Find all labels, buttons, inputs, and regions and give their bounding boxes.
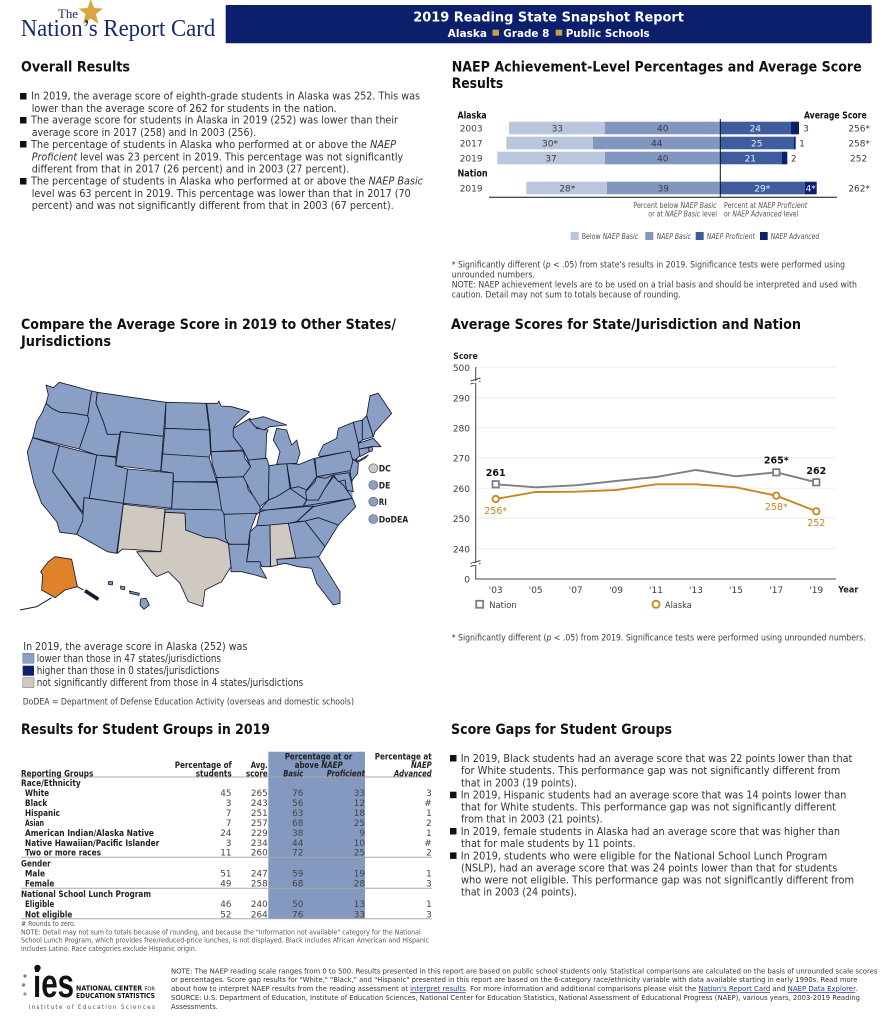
legend: DC, DE, RI, DoDEA markers: DE <box>379 481 390 491</box>
text block: table notes <box>21 919 429 953</box>
bar: Alaska 2019: 252 <box>850 154 867 164</box>
table rows: race/ethnicity: Native Hawaiian/Pacific Islander <box>25 839 160 849</box>
table rows: race/ethnicity: 2 <box>426 849 432 859</box>
data labels: 265* <box>764 456 789 466</box>
data labels <box>484 456 826 529</box>
bar: Nation 2019: 28* <box>559 184 576 194</box>
bar: Alaska 2003: 24 <box>750 124 761 134</box>
state: Alaska (orange) <box>20 557 98 610</box>
line chart: average scores: 240 <box>453 545 470 555</box>
table rows: gender: 49 <box>220 880 232 890</box>
line chart: average scores: '15 <box>729 586 743 596</box>
bar: Alaska 2019 <box>460 152 867 164</box>
states with higher scores than Alaska (blue) <box>27 382 392 609</box>
text block: achievement notes: unrounded numbers. <box>452 270 535 280</box>
table rows: gender: Male <box>25 870 45 880</box>
line chart: average scores: Year <box>837 586 859 596</box>
table rows: race/ethnicity: Two or more races <box>25 849 101 859</box>
legend: achievement levels: NAEP Advanced <box>771 232 819 241</box>
table header: Reporting Groups <box>21 769 93 779</box>
bar: Alaska 2017: 44 <box>651 139 663 149</box>
table rows: National School Lunch Program: 50 <box>292 900 304 910</box>
logo: The Nation's Report Card: Nation’s Report Card <box>21 15 215 42</box>
legend: map key <box>23 641 354 708</box>
text block: overall results bullets: The percentage of students in Alaska who performed at or above the NAEP Basic <box>30 176 423 188</box>
table rows: race/ethnicity: Hispanic <box>25 809 60 819</box>
data labels: 256* <box>484 506 507 517</box>
data labels: 252 <box>807 518 825 529</box>
table rows: race/ethnicity: 63 <box>292 809 303 819</box>
table rows: race/ethnicity: 265 <box>251 789 268 799</box>
text block: table notes: NOTE: Detail may not sum to totals because of rounding, and because the "Information not available" category for the National <box>21 927 421 936</box>
table rows: National School Lunch Program: 13 <box>354 900 365 910</box>
line chart: average scores: '17 <box>769 586 783 596</box>
bar: Nation 2019: 29* <box>754 184 771 194</box>
logo: IES National Center for Education Statistics: EDUCATION STATISTICS <box>76 992 155 1000</box>
table header: score <box>246 769 268 779</box>
bar: Alaska 2017: 1 <box>799 139 805 149</box>
text block: score gaps bullets: that for White students. This performance gap was not significantly different <box>461 802 836 814</box>
line chart: average scores: 250 <box>453 515 470 525</box>
table header: students <box>196 769 232 779</box>
line chart: average scores: '07 <box>569 586 583 596</box>
table header: Basic <box>283 769 304 779</box>
table rows: race/ethnicity: 3 <box>226 839 232 849</box>
legend: DC, DE, RI, DoDEA markers <box>369 464 408 525</box>
table header: Proficient <box>327 769 366 779</box>
table rows: gender: Female <box>25 880 54 890</box>
table rows: National School Lunch Program: 240 <box>251 900 268 910</box>
legend: Nation and Alaska: Nation <box>489 601 517 611</box>
legend: map key: lower than those in 47 states/jurisdictions <box>37 653 221 665</box>
table header: Advanced <box>393 769 432 779</box>
bar: Alaska 2003: 3 <box>803 124 809 134</box>
bar: Nation 2019: 39 <box>658 184 669 194</box>
heading: Compare the Average Score: Compare the Average Score in 2019 to Other States/ <box>21 317 397 333</box>
table: student groups <box>21 752 432 920</box>
table rows: race/ethnicity: 10 <box>354 839 365 849</box>
bar: Nation 2019: 2019 <box>460 184 483 194</box>
table rows: National School Lunch Program: 3 <box>426 910 432 920</box>
legend: achievement levels: Below NAEP Basic <box>582 232 639 241</box>
bar: Alaska 2017: 258* <box>848 139 870 149</box>
table rows: National School Lunch Program: Not eligible <box>25 910 72 920</box>
heading: Compare the Average Score <box>20 317 397 350</box>
text block: footer notes: about how to interpret NAEP results from the reading assessment at interpret results. For more information and additional comparisons please visit the Nation's Report Card and NAEP Data Explorer. <box>171 984 858 993</box>
text block: overall results bullets: The percentage of students in Alaska who performed at or above the NAEP <box>30 139 397 151</box>
table rows: gender: 51 <box>220 870 232 880</box>
table rows: race/ethnicity: 44 <box>292 839 304 849</box>
chart: achievement-level stacked bars: Percent below NAEP Basic <box>633 201 717 210</box>
line chart: average scores: 290 <box>453 394 470 404</box>
table rows: race/ethnicity: 76 <box>292 789 304 799</box>
table rows: race/ethnicity: 68 <box>292 819 303 829</box>
bar: Alaska 2019: 40 <box>657 154 669 164</box>
table rows: gender: 68 <box>292 880 303 890</box>
logo: IES National Center for Education Statistics <box>22 962 155 1011</box>
table rows: gender: Gender <box>21 860 51 870</box>
table rows: race/ethnicity: 3 <box>226 799 232 809</box>
line chart: average scores: Score <box>453 352 478 362</box>
heading: Results for Student Groups: Results for Student Groups in 2019 <box>21 722 270 738</box>
heading: Compare the Average Score: Jurisdictions <box>20 334 111 350</box>
text block: score gaps bullets <box>450 753 854 899</box>
table rows: race/ethnicity: Asian <box>25 819 44 829</box>
table rows: race/ethnicity: American Indian/Alaska Native <box>25 829 154 839</box>
title banner: Alaska <box>448 28 487 40</box>
text block: score gaps bullets: that in 2003 (19 points). <box>461 777 577 789</box>
data labels: 258* <box>765 502 788 513</box>
logo: The Nation's Report Card <box>21 0 215 42</box>
legend: map key: In 2019, the average score in Alaska (252) was <box>23 641 247 653</box>
text block: score gaps bullets: that for male students by 11 points. <box>461 838 636 850</box>
table header: Percentage of <box>175 761 232 771</box>
table rows: race/ethnicity: Black <box>25 799 48 809</box>
table rows: gender: 3 <box>426 880 432 890</box>
table rows: race/ethnicity: 260 <box>251 849 268 859</box>
bar: Nation 2019 <box>460 182 870 194</box>
table rows: race/ethnicity: 229 <box>251 829 268 839</box>
table rows: race/ethnicity: 234 <box>251 839 268 849</box>
table rows: race/ethnicity: 25 <box>354 819 365 829</box>
legend: Nation and Alaska <box>476 601 692 611</box>
chart: achievement-level stacked bars: Nation <box>458 168 488 179</box>
line chart: average scores: '03 <box>489 586 503 596</box>
legend: achievement levels: NAEP Proficient <box>707 232 756 241</box>
line: Nation <box>492 469 820 488</box>
line chart: average scores: '09 <box>609 586 623 596</box>
bar: Alaska 2017: 25 <box>751 139 762 149</box>
heading: NAEP Achievement-Level Percentages <box>452 60 862 92</box>
table rows: National School Lunch Program: 33 <box>354 910 365 920</box>
text block: score gaps bullets: (NSLP), had an average score that was 24 points lower than that for students <box>461 862 837 874</box>
table rows: gender: 19 <box>354 870 365 880</box>
table rows: National School Lunch Program: Eligible <box>25 900 54 910</box>
table rows: gender <box>21 860 432 890</box>
heading: NAEP Achievement-Level Percentages: Results <box>452 76 503 92</box>
logo: IES National Center for Education Statistics: NATIONAL CENTER FOR <box>76 984 155 992</box>
text block: score gaps bullets: who were not eligible. This performance gap was not significantly different from <box>461 875 854 887</box>
table header: Percentage at or <box>285 752 353 762</box>
table rows: National School Lunch Program: National School Lunch Program <box>21 890 151 900</box>
text block: overall results bullets: percent) and was not significantly different from that in 2003 (67 percent). <box>32 200 394 212</box>
table rows: gender: 1 <box>426 870 432 880</box>
legend: map key: not significantly different from those in 4 states/jurisdictions <box>37 677 303 689</box>
text block: achievement notes: * Significantly different (p < .05) from state's results in 2019. Significance tests were performed using <box>452 260 845 270</box>
table rows: race/ethnicity: 24 <box>220 829 232 839</box>
table header: above NAEP <box>295 761 343 771</box>
logo: The Nation's Report Card: The <box>58 7 78 21</box>
table rows: National School Lunch Program: 264 <box>251 910 268 920</box>
legend: map key: DoDEA = Department of Defense Education Activity (overseas and domestic schools) <box>23 698 354 708</box>
bar: Alaska 2003 <box>460 122 870 134</box>
table rows: race/ethnicity: # <box>424 799 432 809</box>
text block: overall results bullets: average score in 2017 (258) and in 2003 (256). <box>32 127 256 139</box>
bar: Alaska 2019: 21 <box>745 154 756 164</box>
line chart: average scores: 260 <box>453 485 470 495</box>
table rows: National School Lunch Program <box>21 890 432 920</box>
text block: score gaps bullets: that in 2003 (24 points). <box>461 887 577 899</box>
chart: achievement-level stacked bars: Alaska <box>458 111 487 122</box>
text block: achievement notes <box>452 260 857 300</box>
bar: Alaska 2019: 37 <box>545 154 557 164</box>
table rows: race/ethnicity: 251 <box>251 809 268 819</box>
title banner: Grade 8 <box>503 28 549 40</box>
heading: Score Gaps: Score Gaps for Student Groups <box>451 722 672 738</box>
legend: map key: higher than those in 0 states/jurisdictions <box>37 665 219 677</box>
line chart: average scores: '19 <box>809 586 824 596</box>
table rows: gender: 258 <box>251 880 268 890</box>
table rows: race/ethnicity: 2 <box>426 819 432 829</box>
text block: overall results bullets: In 2019, the average score of eighth-grade students in Alaska was 252. This was <box>31 91 420 103</box>
text block: score gaps bullets: In 2019, Hispanic students had an average score that was 14 points lower than <box>461 790 846 802</box>
text block: score gaps bullets: In 2019, female students in Alaska had an average score that was higher than <box>461 826 840 838</box>
line chart: average scores: 500 <box>453 364 470 374</box>
bar: Alaska 2017: 2017 <box>460 139 483 149</box>
legend: DC, DE, RI, DoDEA markers: DoDEA <box>379 515 408 525</box>
logo: IES National Center for Education Statistics: Institute of Education Sciences <box>28 1005 155 1011</box>
table rows: race/ethnicity: # <box>424 839 432 849</box>
table rows: race/ethnicity: 72 <box>292 849 303 859</box>
bar: Alaska 2003: 2003 <box>460 124 483 134</box>
table rows: race/ethnicity: Race/Ethnicity <box>21 779 81 789</box>
text block: score gaps bullets: from that in 2003 (21 points). <box>461 814 603 826</box>
table rows: race/ethnicity: 257 <box>251 819 268 829</box>
title banner: Public Schools <box>566 28 650 40</box>
legend: DC, DE, RI, DoDEA markers: RI <box>379 498 387 508</box>
legend: DC, DE, RI, DoDEA markers: DC <box>379 465 391 475</box>
bar: Alaska 2019: 2 <box>791 154 797 164</box>
table header: Avg. <box>251 761 268 771</box>
text block: table notes: includes Latino. Race categories exclude Hispanic origin. <box>21 944 197 953</box>
table rows: race/ethnicity: 12 <box>354 799 365 809</box>
bar: Nation 2019: 262* <box>848 184 870 194</box>
bar: Alaska 2003: 33 <box>552 124 563 134</box>
text block: score gaps bullets: In 2019, Black students had an average score that was 22 points lower than that <box>461 753 852 765</box>
line: Alaska <box>492 484 820 514</box>
table rows: race/ethnicity: 3 <box>426 789 432 799</box>
table rows: National School Lunch Program: 1 <box>426 900 432 910</box>
bar: Alaska 2019: 2019 <box>460 154 483 164</box>
chart: achievement-level stacked bars: Percent at NAEP Proficient <box>724 201 808 210</box>
table rows: race/ethnicity: 38 <box>292 829 303 839</box>
table header <box>21 752 432 779</box>
chart: achievement-level stacked bars: or NAEP Advanced level <box>724 209 798 218</box>
chart: achievement-level stacked bars <box>458 111 870 218</box>
text block: footer notes: Assessments. <box>171 1002 218 1011</box>
text block: table notes: # Rounds to zero. <box>21 919 76 928</box>
chart: achievement-level stacked bars: Average Score <box>804 111 867 122</box>
bar: Alaska 2003: 40 <box>657 124 669 134</box>
data labels: 262 <box>806 466 826 477</box>
table rows: race/ethnicity: 243 <box>251 799 268 809</box>
line chart: average scores: '13 <box>689 586 703 596</box>
text block: overall results bullets: Proficient level was 23 percent in 2019. This percentage was not significantly <box>32 151 403 163</box>
line chart: average scores: '11 <box>649 586 663 596</box>
table header: NAEP <box>411 761 432 771</box>
line chart: average scores: 0 <box>464 576 470 586</box>
table rows: gender: 247 <box>251 870 268 880</box>
line chart: average scores: 270 <box>453 454 470 464</box>
table rows: race/ethnicity <box>21 779 432 859</box>
table rows: National School Lunch Program: 76 <box>292 910 304 920</box>
line chart: average scores: 280 <box>453 424 470 434</box>
heading: Overall Results: Overall Results <box>21 60 130 76</box>
table rows: race/ethnicity: 33 <box>354 789 365 799</box>
table rows: race/ethnicity: White <box>25 789 49 799</box>
chart: achievement-level stacked bars: or at NAEP Basic level <box>648 209 717 218</box>
table rows: race/ethnicity: 56 <box>292 799 304 809</box>
title banner <box>226 5 872 43</box>
map: United States score comparison <box>20 382 392 610</box>
bar: Nation 2019: 4* <box>806 184 816 194</box>
table rows: race/ethnicity: 7 <box>226 819 232 829</box>
table rows: race/ethnicity: 7 <box>226 809 232 819</box>
text block: overall results bullets: lower than the average score of 262 for students in the nation. <box>32 103 337 115</box>
legend: Nation and Alaska: Alaska <box>665 601 692 611</box>
table rows: race/ethnicity: 25 <box>354 849 365 859</box>
table rows: race/ethnicity: 9 <box>359 829 365 839</box>
data labels: 261 <box>486 468 506 479</box>
table rows: race/ethnicity: 11 <box>220 849 232 859</box>
text block: overall results bullets: The average score for students in Alaska in 2019 (252) was lower than their <box>30 115 399 127</box>
states not significantly different (tan) <box>117 504 296 607</box>
legend: achievement levels <box>571 232 819 241</box>
table rows: National School Lunch Program: 46 <box>220 900 232 910</box>
text block: achievement notes: caution. Detail may not sum to totals because of rounding. <box>452 290 681 300</box>
bar: Alaska 2017 <box>460 137 870 149</box>
logo: IES National Center for Education Statistics: ies <box>33 962 74 1006</box>
table rows: race/ethnicity: 18 <box>354 809 365 819</box>
text block: overall results bullets: level was 63 percent in 2019. This percentage was lower than that in 2017 (70 <box>32 188 411 200</box>
line chart: average scores: '05 <box>529 586 543 596</box>
legend: achievement levels: NAEP Basic <box>657 232 692 241</box>
text block: footer notes: SOURCE: U.S. Department of Education, Institute of Education Sciences, National Center for Education Statistics, National Assessment of Educational Progress (NAEP), various years, 2003-2019 Reading <box>171 993 860 1002</box>
text block: table notes: School Lunch Program, which provides free/reduced-price lunches, is not displayed. Black includes African American and Hispanic <box>21 936 429 945</box>
table rows: gender: 59 <box>292 870 303 880</box>
table rows: National School Lunch Program: 52 <box>220 910 232 920</box>
title banner: 2019 Reading State Snapshot Report <box>413 10 684 26</box>
text block: footer notes <box>171 966 878 1011</box>
text block: overall results bullets: different from that in 2017 (26 percent) and in 2003 (27 percent). <box>32 163 349 175</box>
text block: score gaps bullets: for White students. This performance gap was not significantly different from <box>461 765 840 777</box>
heading: Average Scores: Average Scores for State/Jurisdiction and Nation <box>451 317 801 333</box>
table rows: race/ethnicity: 1 <box>426 829 432 839</box>
table rows: race/ethnicity: 1 <box>426 809 432 819</box>
text block: score gaps bullets: In 2019, students who were eligible for the National School Lunch Program <box>461 850 827 862</box>
table rows: race/ethnicity: 45 <box>220 789 232 799</box>
table header: Percentage at <box>375 752 432 762</box>
line chart: average scores <box>453 352 859 611</box>
text block: overall results bullets <box>20 91 423 212</box>
bar: Alaska 2003: 256* <box>848 124 870 134</box>
bar: Alaska 2017: 30* <box>542 139 558 149</box>
text block: footer notes: or percentages. Score gap results for "White," "Black," and "Hispanic" presented in this report are based on the 6-category race/ethnicity variable with data available starting in early 1990s. Read more <box>171 975 858 984</box>
table rows: gender: 28 <box>354 880 365 890</box>
